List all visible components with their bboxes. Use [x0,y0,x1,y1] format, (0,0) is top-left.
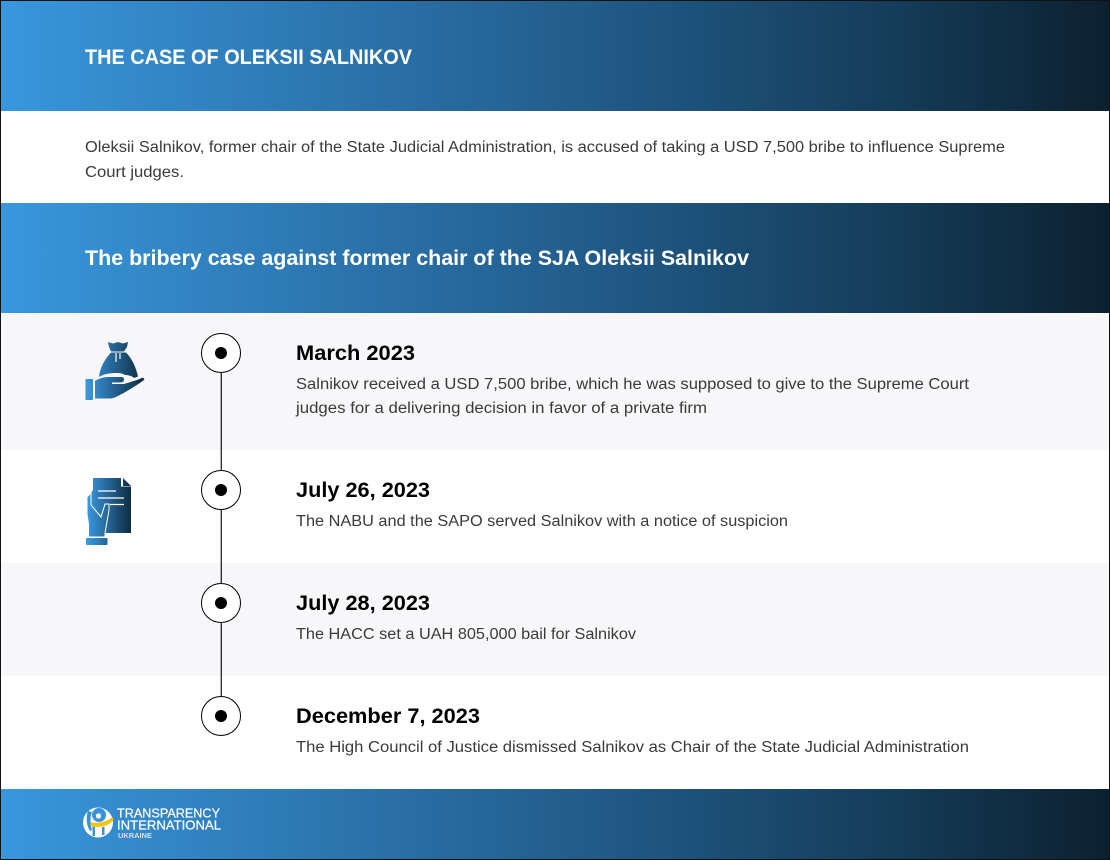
footer banner [0,789,1110,860]
entry: December 7, 2023: December 7, 2023 [296,705,480,728]
entry: July 28, 2023: July 28, 2023 [296,592,430,615]
entry: March 2023 [295,342,970,417]
row backgrounds [0,313,1110,676]
entry: July 28, 2023 [296,592,636,643]
intro text: Oleksii Salnikov, former chair of the State Judicial Administration, is accused of taking a USD 7,500 bribe to influence Supreme [85,139,1005,156]
section heading: The bribery case against former chair of the SJA Oleksii Salnikov [85,247,749,270]
timeline marker: July 26 [202,470,240,510]
timeline marker: March 2023 [202,334,240,372]
header banner [0,0,1110,111]
timeline marker: July 28 [202,584,240,622]
icon: hand holding document [86,478,131,545]
section heading banner [0,203,1110,313]
logo: INTERNATIONAL [117,818,221,832]
entry: July 26, 2023 [296,479,788,530]
intro text [85,139,1005,181]
logo: TRANSPARENCY [117,806,221,820]
entry: July 26, 2023: The NABU and the SAPO served Salnikov with a notice of suspicion [296,513,788,530]
timeline line [221,353,222,716]
entry: March 2023: March 2023 [296,342,415,365]
entry: December 7, 2023 [296,705,969,756]
entry: December 7, 2023: The High Council of Justice dismissed Salnikov as Chair of the State Judicial Administration [296,739,969,756]
icon: money bag on hand [86,342,144,400]
entry: July 26, 2023: July 26, 2023 [296,479,430,502]
entry: March 2023: Salnikov received a USD 7,500 bribe, which he was supposed to give to the Supreme Court [296,376,970,393]
entry: March 2023: judges for a delivering decision in favor of a private firm [295,400,707,417]
logo [83,806,221,840]
timeline marker: December 7 [202,696,240,736]
title: THE CASE OF OLEKSII SALNIKOV [85,46,412,69]
logo: UKRAINE [118,833,152,840]
intro text: Court judges. [85,164,184,181]
entry: July 28, 2023: The HACC set a UAH 805,000 bail for Salnikov [296,626,636,643]
